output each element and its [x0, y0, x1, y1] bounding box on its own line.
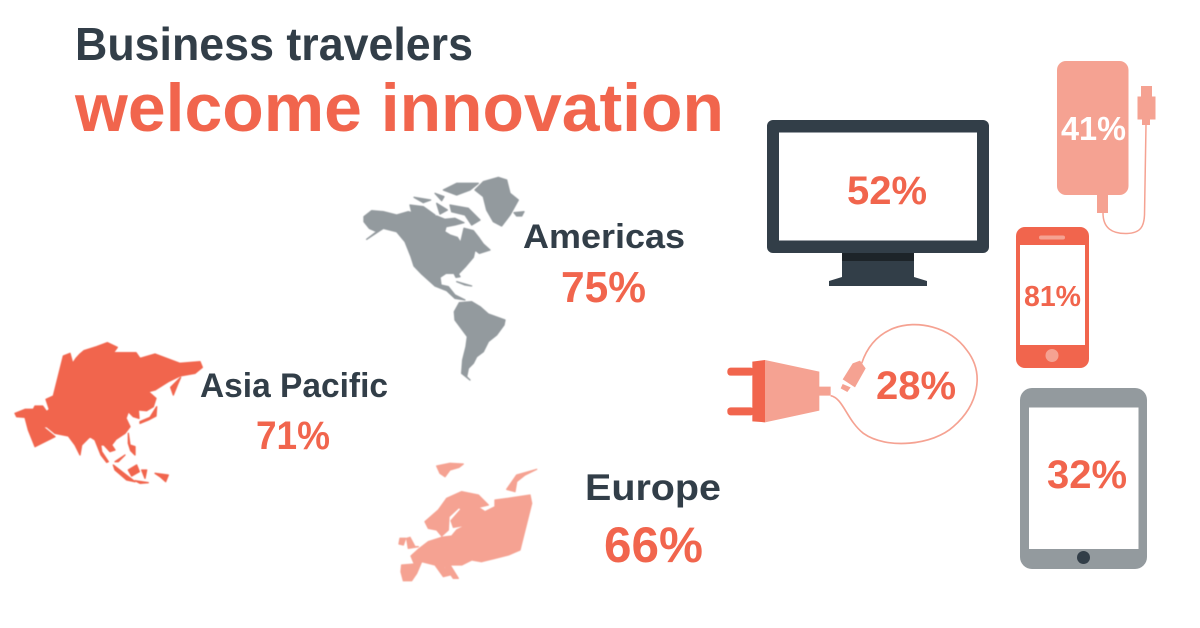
title: [74, 18, 724, 146]
value: Asia Pacific: 71%: [256, 414, 330, 458]
icon: tablet 32%: [1020, 388, 1147, 569]
map: Asia Pacific: [15, 343, 202, 483]
value: desktop: 52%: [847, 169, 927, 213]
value: electric plug: 28%: [876, 364, 956, 408]
value: Americas: 75%: [561, 263, 646, 312]
map: Europe: [399, 463, 537, 581]
icon: smartphone 81%: [1016, 227, 1089, 368]
value: smartphone: 81%: [1024, 281, 1081, 313]
region name: Americas: Americas: [523, 218, 685, 256]
label: Asia Pacific 71%: [200, 367, 388, 458]
region name: Europe: Europe: [585, 467, 721, 508]
value: tablet: 32%: [1047, 453, 1127, 497]
label: Americas 75%: [523, 218, 685, 312]
title line 2: welcome innovation: [74, 70, 724, 146]
value: Europe: 66%: [604, 517, 703, 573]
icon: power bank 41%: [1057, 61, 1156, 234]
title line 1: Business travelers: [75, 18, 473, 70]
value: power bank: 41%: [1061, 110, 1126, 147]
map: Americas: [364, 177, 524, 380]
icon: plug with cord 28%: [727, 325, 977, 443]
label: Europe 66%: [585, 467, 721, 573]
icon: desktop monitor 52%: [767, 120, 989, 286]
region name: Asia Pacific: Asia Pacific: [200, 367, 388, 405]
